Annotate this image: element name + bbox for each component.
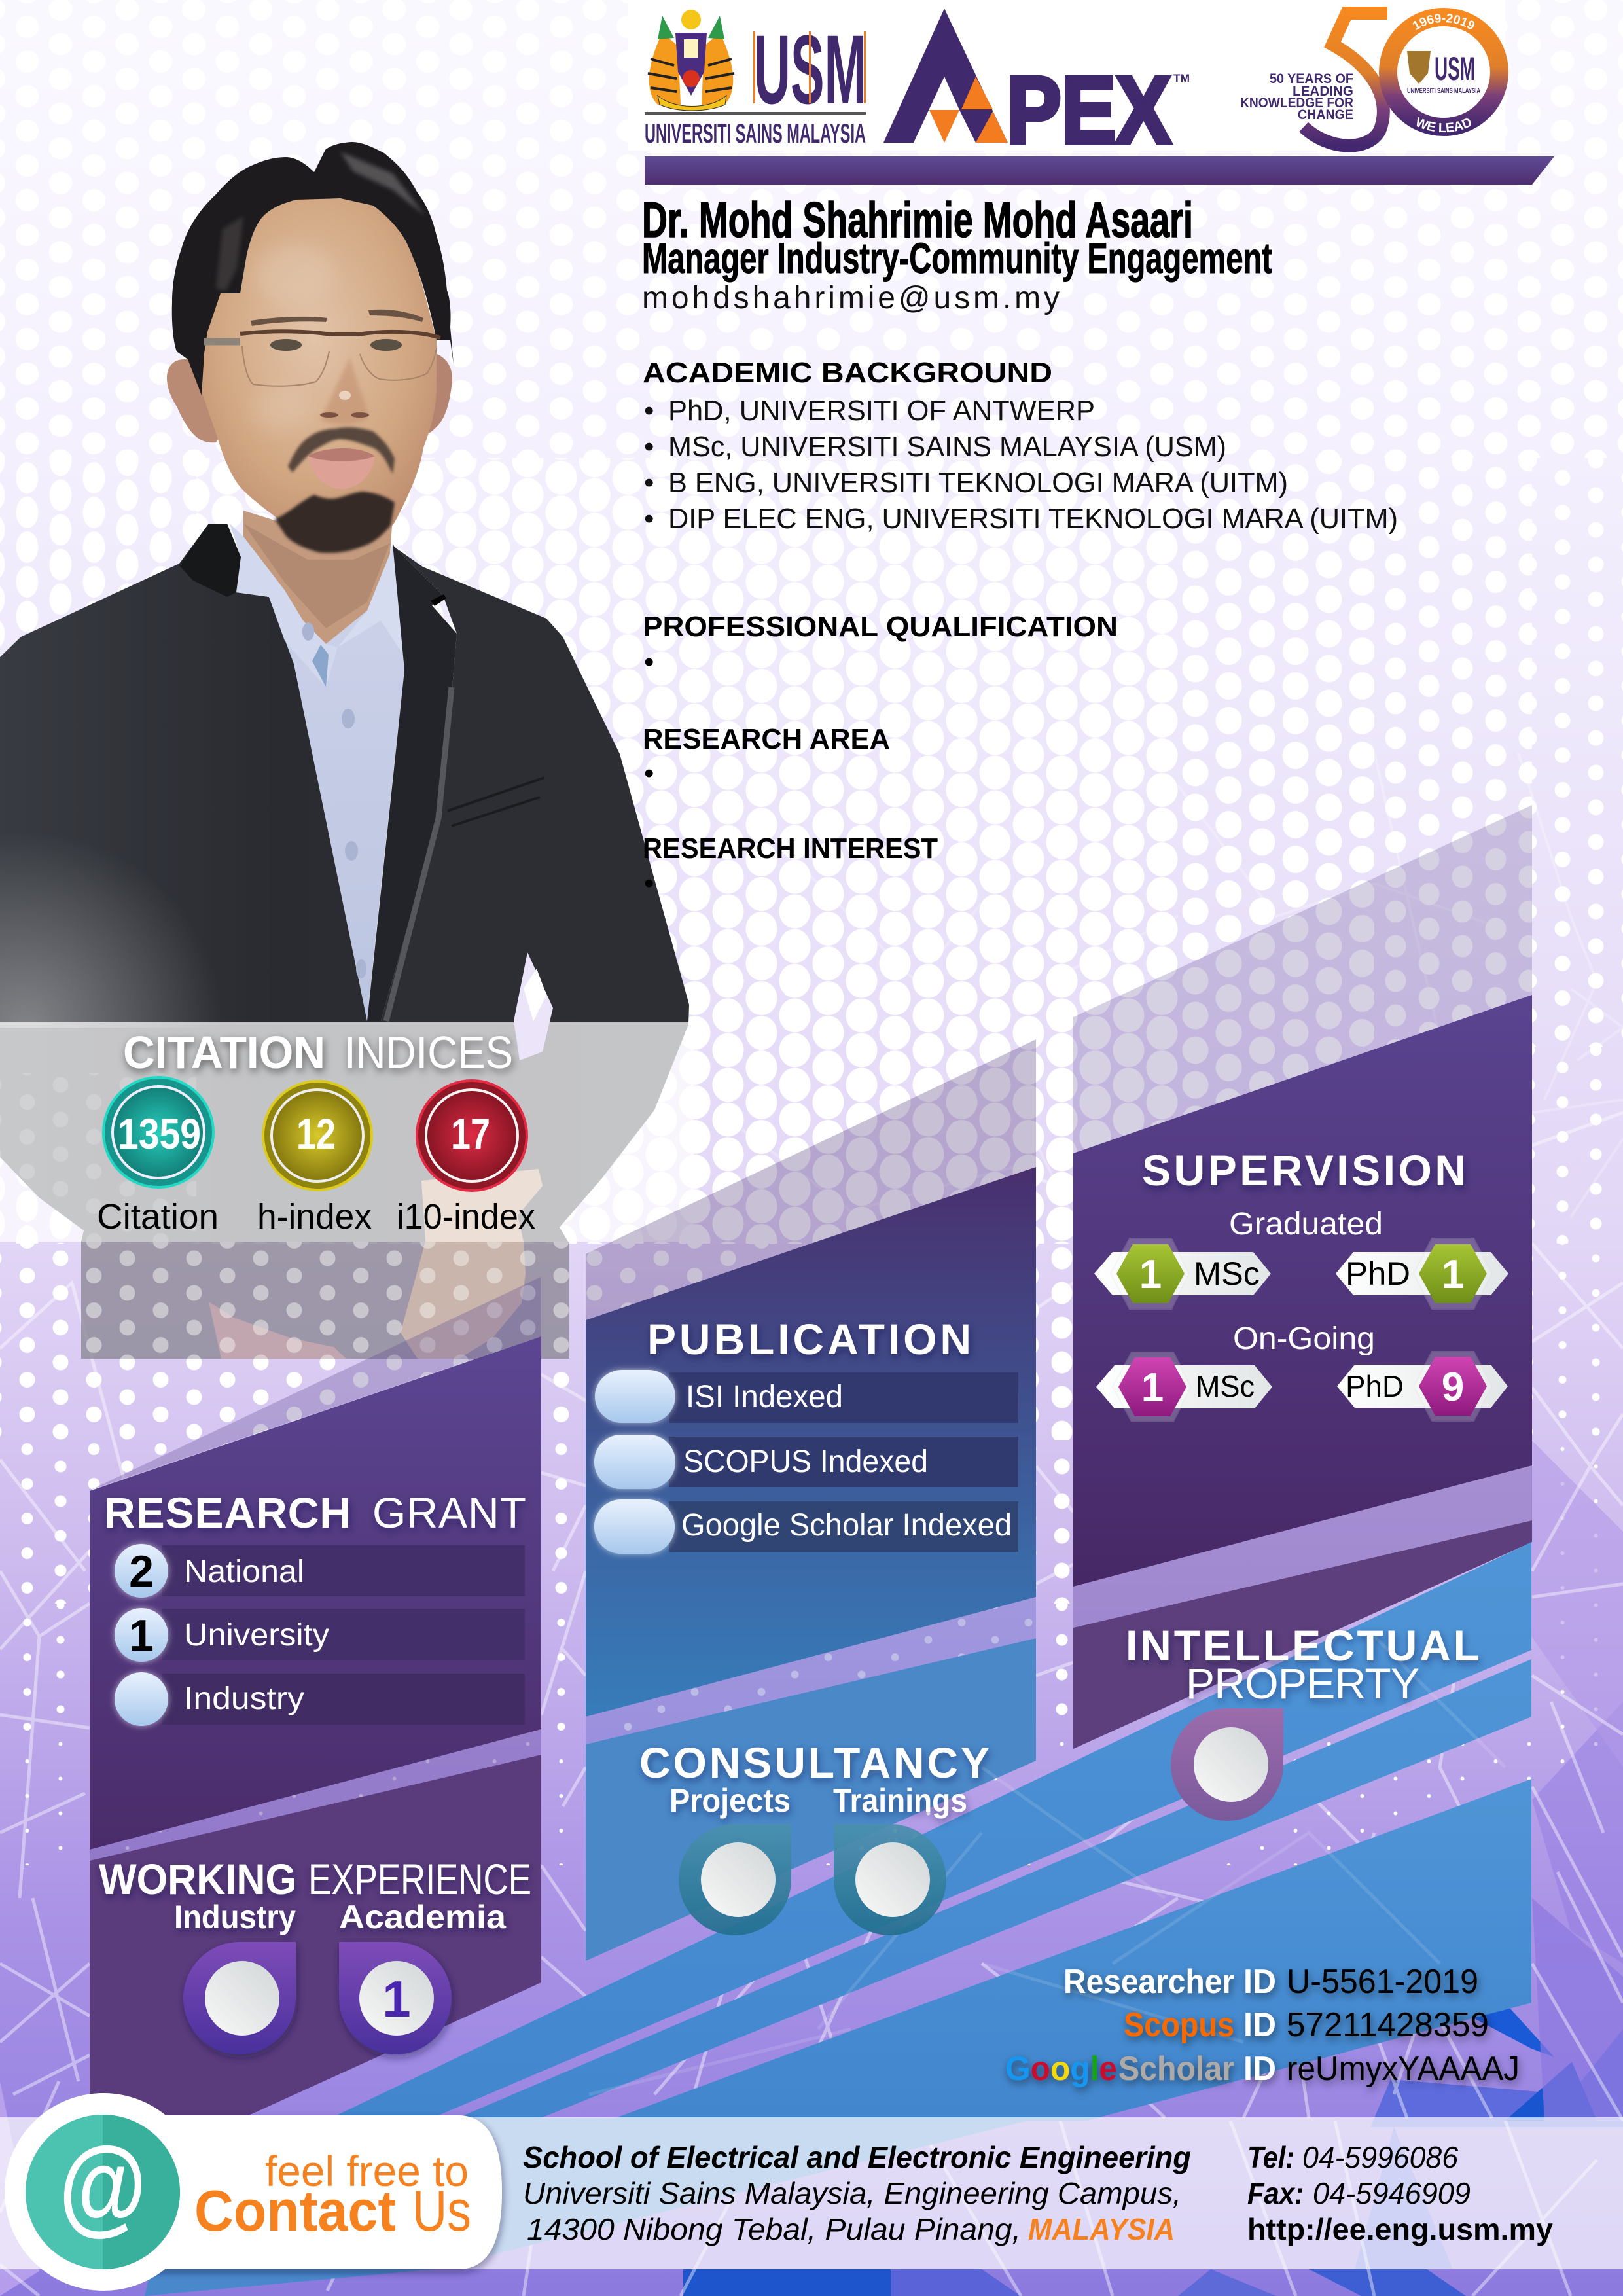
contact details: 04-5946909 <box>1313 2176 1471 2210</box>
counter: industry <box>183 1942 296 2054</box>
heading <box>99 1855 531 1935</box>
facets <box>1532 1702 1623 1964</box>
research area <box>643 723 890 789</box>
labels: h-index <box>257 1197 372 1236</box>
contact details <box>1247 2140 1553 2246</box>
badge: on-going MSc <box>1096 1352 1272 1422</box>
badge: on-going MSc: 1 <box>1141 1365 1164 1410</box>
panel: publication <box>586 1039 1036 1744</box>
logo: APEX: PEX <box>1007 57 1171 163</box>
badge: i10-index <box>417 1081 527 1191</box>
counter: projects <box>679 1824 791 1935</box>
logo: USM 50 years: WE LEAD <box>1416 117 1471 132</box>
logo: USM 50 years: LEADING <box>1293 84 1353 99</box>
heading: Projects <box>669 1782 791 1819</box>
neck <box>243 511 393 644</box>
panel: working experience <box>90 1755 541 2115</box>
school address: MALAYSIA <box>1028 2212 1175 2246</box>
heading: EXPERIENCE <box>308 1855 531 1903</box>
row: Google Scholar <box>594 1499 1018 1554</box>
row: national: 2 <box>129 1547 154 1596</box>
heading: INTELLECTUAL <box>1126 1621 1480 1670</box>
heading: PUBLICATION <box>647 1315 971 1363</box>
left sleeve fade <box>0 831 223 1028</box>
heading <box>1126 1621 1480 1708</box>
eyebrows <box>251 310 423 326</box>
heading <box>639 1738 990 1819</box>
row: national <box>115 1544 525 1598</box>
row: ISI <box>595 1370 1018 1423</box>
jacket <box>0 524 688 1242</box>
counter: trainings <box>834 1824 946 1935</box>
hair <box>172 142 454 395</box>
counter: academia <box>339 1942 452 2054</box>
contact badge <box>5 2093 502 2291</box>
academic background: • <box>644 503 654 535</box>
heading: PROPERTY <box>1186 1659 1419 1708</box>
badge: citation: 1359 <box>118 1109 201 1158</box>
school address: Universiti Sains Malaysia, Engineering Campus, <box>523 2176 1181 2210</box>
lips <box>308 448 375 489</box>
academic background: B ENG, UNIVERSITI TEKNOLOGI MARA (UITM) <box>668 467 1288 499</box>
forehead highlight <box>255 245 334 304</box>
badge: graduated PhD: 1 <box>1442 1252 1464 1297</box>
profile name block: Manager Industry-Community Engagement <box>642 234 1272 282</box>
academic background <box>643 357 1398 535</box>
heading: CITATION <box>123 1027 325 1078</box>
badge: graduated PhD: PhD <box>1346 1255 1410 1292</box>
shirt <box>230 524 404 1021</box>
panel: citation indices <box>0 952 694 1359</box>
researcher id <box>1063 1963 1478 2001</box>
heading: Industry <box>174 1899 296 1935</box>
logo: USM 50 years: KNOWLEDGE FOR <box>1240 96 1353 111</box>
right lapel <box>367 544 457 1021</box>
face <box>201 198 437 547</box>
logo: USM crest and wordmark: UNIVERSITI SAINS MALAYSIA <box>645 118 866 149</box>
scopus id <box>1124 2006 1489 2044</box>
left collar <box>230 524 338 687</box>
academic background: • <box>644 395 654 427</box>
profile name block <box>642 192 1272 315</box>
scopus id: 57211428359 <box>1287 2006 1489 2044</box>
profile name block: Dr. Mohd Shahrimie Mohd Asaari <box>642 192 1193 248</box>
panel: research grant <box>90 1277 541 1861</box>
intellectual property content <box>1126 1621 1480 1821</box>
heading: INDICES <box>344 1027 513 1078</box>
logo: USM 50 years: 50 YEARS OF <box>1270 71 1353 86</box>
professional qualification: • <box>644 646 654 678</box>
nose <box>321 357 368 425</box>
badge: on-going MSc: MSc <box>1196 1369 1255 1403</box>
researcher id: Researcher <box>1063 1963 1234 2001</box>
badge: citation <box>103 1077 213 1187</box>
heading: CONSULTANCY <box>639 1738 990 1787</box>
badge: on-going PhD <box>1337 1352 1508 1421</box>
scopus id: Scopus <box>1124 2006 1234 2044</box>
heading <box>104 1488 526 1537</box>
hair highlight <box>216 216 243 291</box>
pocket <box>448 778 544 826</box>
semi-transparent lower block <box>81 1242 569 1359</box>
badge: graduated MSc: 1 <box>1139 1252 1162 1297</box>
academic background: DIP ELEC ENG, UNIVERSITI TEKNOLOGI MARA (UITM) <box>668 503 1398 535</box>
labels: i10-index <box>397 1197 535 1236</box>
academic background: MSc, UNIVERSITI SAINS MALAYSIA (USM) <box>668 431 1226 463</box>
heading: GRANT <box>372 1488 526 1537</box>
row: university <box>115 1608 525 1662</box>
academic background: PhD, UNIVERSITI OF ANTWERP <box>668 395 1095 427</box>
row: ISI: ISI Indexed <box>686 1380 843 1414</box>
professional qualification: PROFESSIONAL QUALIFICATION <box>643 611 1118 643</box>
contact details: Fax: <box>1247 2176 1304 2210</box>
consultancy content <box>639 1738 990 1935</box>
counter: academia: 1 <box>382 1970 411 2028</box>
moustache <box>288 427 395 474</box>
school address: 14300 Nibong Tebal, Pulau Pinang, <box>527 2212 1021 2246</box>
research interest: • <box>644 867 654 899</box>
logo: USM 50 years: CHANGE <box>1298 107 1353 122</box>
panel: consultancy background <box>586 1638 1036 1961</box>
contact badge: @ <box>59 2125 147 2245</box>
research interest: RESEARCH INTEREST <box>643 833 938 865</box>
academic background: • <box>644 431 654 463</box>
google scholar id: Google <box>1005 2050 1117 2088</box>
google scholar id: ID <box>1243 2050 1276 2088</box>
row: SCOPUS: SCOPUS Indexed <box>683 1444 928 1479</box>
header bar <box>645 156 1554 185</box>
row: Google Scholar: Google Scholar Indexed <box>681 1508 1012 1543</box>
profile name block: mohdshahrimie@usm.my <box>642 281 1060 315</box>
row: national: National <box>184 1554 304 1589</box>
row: SCOPUS <box>594 1435 1018 1489</box>
glasses <box>204 331 440 386</box>
counter: IP <box>1171 1708 1283 1821</box>
contact badge: feel free to <box>265 2147 469 2195</box>
right collar <box>338 544 404 657</box>
logo: USM 50 years: 1969-2019 <box>1412 14 1475 30</box>
mesh lines <box>0 753 1623 2296</box>
row: industry <box>115 1672 525 1726</box>
contact badge: Us <box>412 2178 471 2243</box>
label: on-going: On-Going <box>1233 1321 1375 1356</box>
academic background: ACADEMIC BACKGROUND <box>643 357 1052 389</box>
diagonal blue bands <box>145 1542 1531 2296</box>
school address <box>523 2140 1191 2246</box>
ear right <box>429 353 452 433</box>
research area: • <box>644 757 654 789</box>
USM letters: USM <box>754 14 866 124</box>
badge: h-index: 12 <box>296 1109 336 1158</box>
heading: Trainings <box>833 1782 967 1819</box>
placket blue <box>312 645 329 687</box>
heading: Academia <box>339 1899 507 1935</box>
school address: School of Electrical and Electronic Engineering <box>523 2140 1191 2174</box>
photo: man in dark jacket <box>0 142 689 1242</box>
badge: graduated PhD <box>1336 1238 1508 1309</box>
panel: supervision <box>1073 805 1532 1628</box>
contact details: http://ee.eng.usm.my <box>1247 2212 1553 2246</box>
left lapel <box>179 524 241 597</box>
badge: h-index <box>263 1081 372 1190</box>
researcher identifiers <box>1005 1963 1520 2088</box>
scopus id: ID <box>1243 2006 1276 2044</box>
contact details: 04-5996086 <box>1302 2140 1458 2174</box>
badge: graduated MSc: MSc <box>1194 1255 1260 1292</box>
research area: RESEARCH AREA <box>643 723 890 755</box>
shirt buttons <box>302 622 366 978</box>
heading: WORKING <box>99 1855 296 1903</box>
label: graduated: Graduated <box>1229 1207 1383 1242</box>
labels <box>97 1197 535 1236</box>
contact details: Tel: <box>1247 2140 1294 2174</box>
row: university: University <box>184 1618 329 1653</box>
logo: APEX: TM <box>1173 72 1190 84</box>
badge: i10-index: 17 <box>451 1109 490 1158</box>
google scholar id: Scholar <box>1118 2050 1234 2088</box>
badge: on-going PhD: 9 <box>1442 1365 1464 1410</box>
google scholar id <box>1005 2050 1520 2088</box>
panel: intellectual property background <box>1073 1520 1532 1749</box>
google scholar id: reUmyxYAAAAJ <box>1287 2050 1520 2088</box>
logo: USM 50 years: USM <box>1435 50 1475 87</box>
academic background: • <box>644 467 654 499</box>
heading: SUPERVISION <box>1142 1146 1466 1194</box>
heading: RESEARCH <box>104 1488 351 1537</box>
contact badge: Contact <box>194 2178 396 2243</box>
heading <box>123 1027 513 1078</box>
eyes <box>270 339 302 351</box>
professional qualification <box>643 611 1118 678</box>
crest <box>648 10 734 111</box>
row: industry: Industry <box>184 1681 304 1716</box>
logo: USM 50 years: UNIVERSITI SAINS MALAYSIA <box>1407 87 1480 95</box>
footer band <box>0 2117 1623 2269</box>
researcher id: ID <box>1243 1963 1276 2001</box>
logo: USM crest and wordmark <box>628 0 1505 151</box>
jacket torso <box>381 547 689 1024</box>
row: university: 1 <box>129 1611 154 1660</box>
ear left <box>167 359 218 442</box>
research interest <box>643 833 938 899</box>
researcher id: U-5561-2019 <box>1287 1963 1478 2001</box>
badge: graduated MSc <box>1094 1238 1271 1309</box>
labels: Citation <box>97 1197 219 1236</box>
badge: on-going PhD: PhD <box>1346 1369 1404 1403</box>
beard <box>275 492 395 553</box>
logo: APEX <box>883 9 1190 163</box>
logo: USM 50 years <box>1240 7 1508 152</box>
